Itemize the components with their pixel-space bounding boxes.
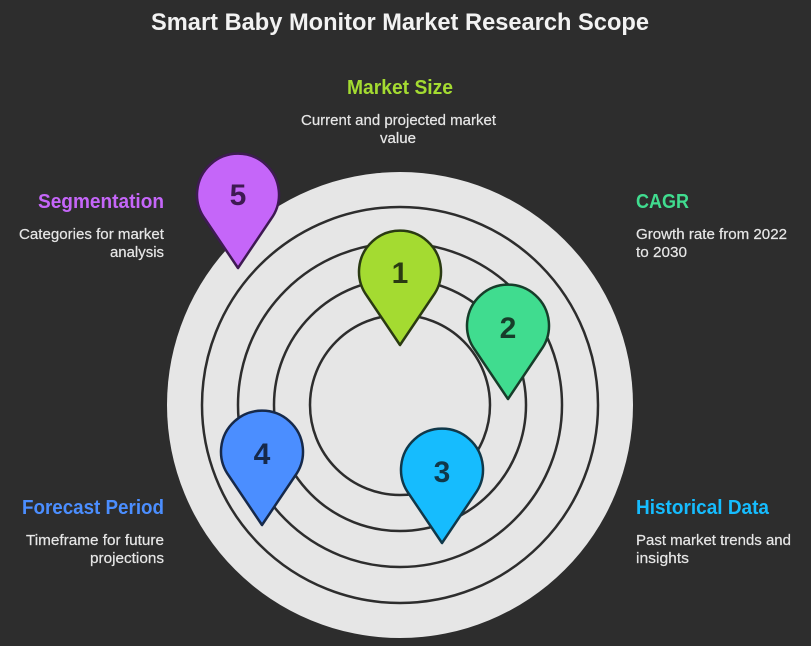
- label: segmentation: analysis: [110, 245, 164, 261]
- pin 5: segmentation: [197, 154, 279, 268]
- pin 1: market size: 1: [392, 257, 408, 290]
- label: historical data: insights: [636, 551, 689, 567]
- label: historical data: [636, 496, 791, 567]
- pin 3: historical data: [401, 429, 483, 543]
- label: historical data: Past market trends and: [636, 533, 791, 549]
- label: forecast period: projections: [90, 551, 164, 567]
- label: forecast period: Forecast Period: [22, 496, 164, 519]
- pin 3: historical data: 3: [434, 456, 450, 489]
- label: historical data: Historical Data: [636, 496, 770, 519]
- label: CAGR: [636, 190, 787, 261]
- concentric ring diagram: [167, 172, 633, 638]
- title: Smart Baby Monitor Market Research Scope: [151, 9, 649, 36]
- label: CAGR: CAGR: [636, 190, 689, 213]
- label: market size: value: [380, 131, 416, 147]
- label: CAGR: Growth rate from 2022: [636, 227, 787, 243]
- pin 4: forecast period: [221, 411, 303, 525]
- label: forecast period: [22, 496, 164, 567]
- pin 2: CAGR: 2: [500, 312, 516, 345]
- pin 1: market size: [359, 231, 441, 345]
- label: market size: Current and projected market: [301, 113, 496, 129]
- label: CAGR: to 2030: [636, 245, 687, 261]
- label: market size: Market Size: [347, 76, 453, 99]
- pin 2: CAGR: [467, 285, 549, 399]
- label: segmentation: Categories for market: [19, 227, 164, 243]
- label: segmentation: Segmentation: [38, 190, 164, 213]
- label: segmentation: [19, 190, 164, 261]
- label: market size: [301, 76, 496, 147]
- label: forecast period: Timeframe for future: [26, 533, 164, 549]
- pin 4: forecast period: 4: [254, 438, 271, 471]
- pin 5: segmentation: 5: [230, 179, 246, 212]
